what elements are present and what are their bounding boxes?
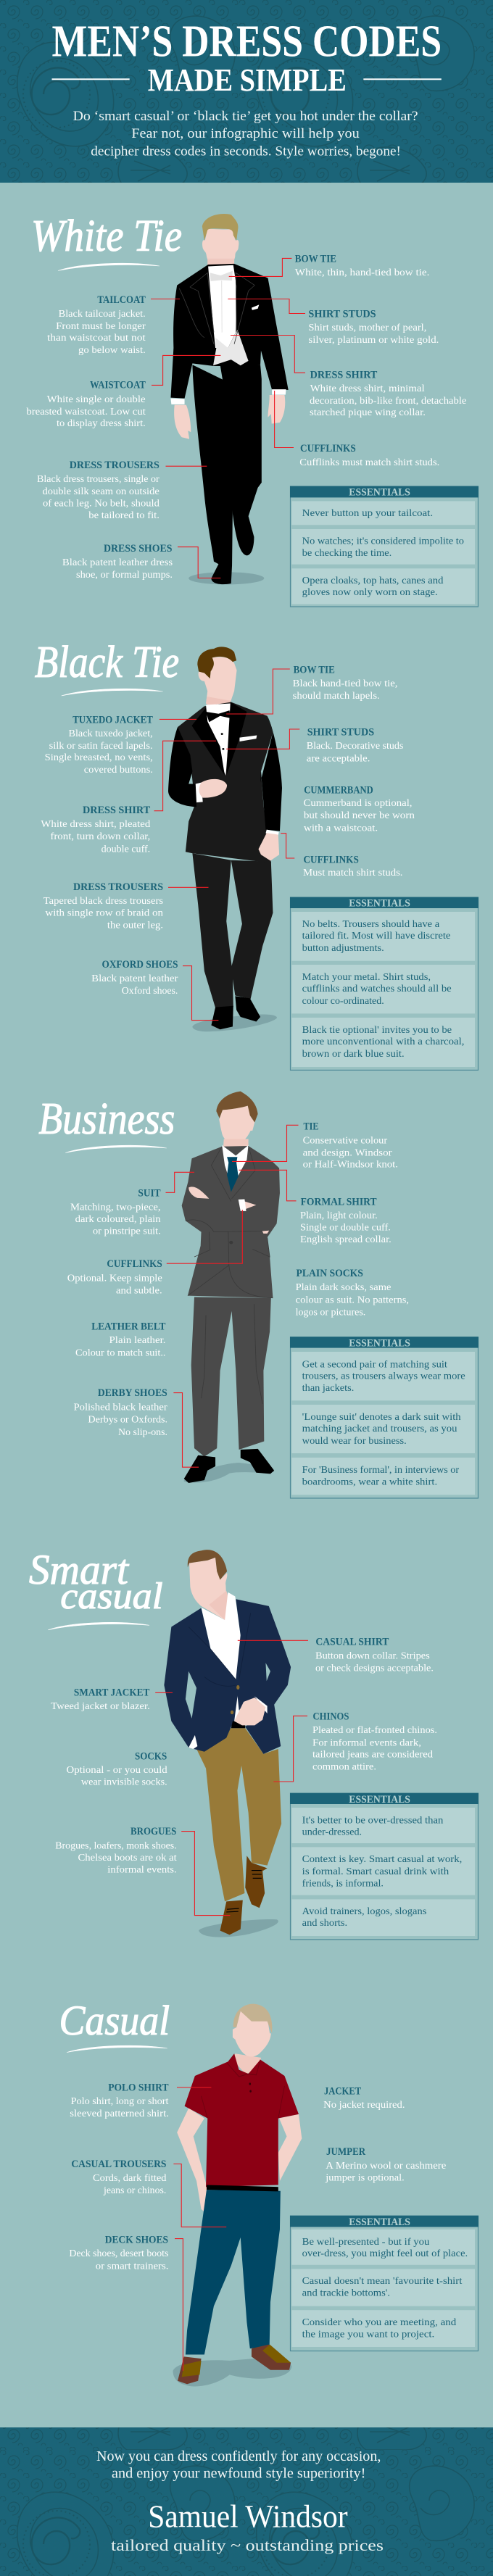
leader line: cufflinks (167, 1210, 242, 1263)
essentials panel: casual: Be well-presented - but if you (302, 2236, 430, 2247)
callout: waistcoat: to display dress shirt. (57, 417, 146, 428)
heading: Black Tie: Black Tie (35, 638, 179, 687)
callout: cufflinks: Must match shirt studs. (303, 867, 403, 878)
section: Business (38, 1092, 478, 1498)
callout: casual trousers: jeans or chinos. (103, 2185, 166, 2195)
essentials panel: casual (290, 2216, 478, 2351)
leader line: smart jacket (155, 1692, 173, 1693)
essentials panel: black tie: Match your metal. Shirt studs, (302, 971, 431, 982)
callout: oxford shoes (91, 959, 178, 996)
intro text: Do ‘smart casual’ or ‘black tie’ get you hot under the collar? (73, 109, 418, 124)
figure: black tie man (168, 647, 282, 1031)
heading: White Tie: White Tie (31, 212, 182, 261)
essentials panel: smart casual: Context is key. Smart casual at work, (302, 1853, 462, 1864)
essentials panel: black tie: Black tie optional' invites you to be (302, 1024, 452, 1035)
essentials panel: white tie: be checking the time. (302, 547, 392, 558)
callout: dress shirt: DRESS SHIRT (83, 805, 151, 816)
callout: dress shirt (41, 805, 151, 854)
essentials panel: white tie: No watches; it's considered impolite to (302, 536, 464, 547)
callout: tailcoat: go below waist. (78, 344, 146, 355)
callout: formal shirt (300, 1196, 392, 1245)
callout: bow tie (295, 253, 429, 278)
callout: bow tie: BOW TIE (294, 664, 335, 676)
heading: Business: Business (38, 1094, 175, 1144)
essentials panel: casual: Consider who you are meeting, and (302, 2317, 456, 2327)
heading: Smart casual: Smart (29, 1546, 130, 1593)
callout: dress trousers: DRESS TROUSERS (73, 881, 163, 893)
callout: dress shirt: decoration, bib-like front, detachable (310, 395, 466, 406)
tagline: tailored quality ~ outstanding prices (111, 2536, 384, 2554)
callout: chinos: For informal events dark, (312, 1737, 421, 1748)
essentials panel: business: trousers, as trousers always wear more (302, 1370, 465, 1381)
essentials panel: black tie: more unconventional with a charcoal, (302, 1036, 464, 1047)
leader line: bow tie (229, 258, 291, 276)
callout: dress shoes: shoe, or formal pumps. (76, 569, 173, 580)
callout: cufflinks: Optional. Keep simple (67, 1272, 162, 1283)
callout: deck shoes: DECK SHOES (105, 2235, 168, 2246)
callout: plain socks: Plain dark socks, same (296, 1281, 391, 1292)
callout: dress shoes (62, 543, 173, 580)
callout: derby shoes: DERBY SHOES (98, 1387, 167, 1399)
callout: chinos: tailored jeans are considered (312, 1748, 433, 1759)
callout: dress trousers: be tailored to fit. (88, 510, 160, 520)
callout: formal shirt: Single or double cuff. (300, 1221, 391, 1232)
leader line: casual shirt (238, 1640, 308, 1641)
callout: tailcoat: Front must be longer (56, 320, 146, 331)
callout: oxford shoes: Oxford shoes. (122, 985, 178, 996)
callout: dress trousers: of each leg. No belt, should (43, 498, 160, 509)
callout: shirt studs: silver, platinum or white gold. (308, 334, 439, 345)
callout: dress shirt: starched pique wing collar. (310, 407, 426, 417)
intro text: decipher dress codes in seconds. Style worries, begone! (91, 144, 401, 159)
callout: socks: SOCKS (135, 1751, 167, 1763)
callout: polo shirt (70, 2082, 169, 2119)
callout: dress shirt (310, 369, 466, 417)
heading: Smart casual (29, 1546, 163, 1630)
section: White Tie (26, 212, 478, 607)
callout: dress shirt: double cuff. (102, 843, 150, 854)
leader line: cufflinks (281, 834, 294, 858)
callout: brogues: Brogues, loafers, monk shoes. (55, 1840, 177, 1850)
essentials panel: business: Get a second pair of matching suit (302, 1358, 447, 1369)
leader line: suit (165, 1172, 194, 1192)
closing message: Now you can dress confidently for any occasion, (96, 2448, 381, 2464)
callout: oxford shoes: OXFORD SHOES (102, 959, 178, 971)
callout: dress trousers: with single row of braid on (45, 907, 163, 918)
callout: chinos: Pleated or flat-fronted chinos. (312, 1724, 437, 1735)
section: Black Tie (35, 638, 478, 1070)
callout: dress shoes: Black patent leather dress (62, 557, 173, 568)
callout: tailcoat: Black tailcoat jacket. (59, 308, 146, 319)
callout: shirt studs: are acceptable. (307, 752, 370, 764)
header banner (0, 0, 493, 183)
figure: casual man (173, 2004, 302, 2386)
callout: chinos: CHINOS (313, 1711, 349, 1722)
callout: deck shoes: Deck shoes, desert boots (69, 2248, 168, 2259)
leader line: dress shoes (178, 547, 220, 578)
callout: bow tie: White, thin, hand-tied bow tie. (295, 267, 429, 278)
brand name: Samuel Windsor (148, 2499, 348, 2535)
callout: dress trousers (44, 881, 163, 931)
callout: shirt studs: Black. Decorative studs (307, 740, 403, 751)
callout: leather belt: Colour to match suit.. (75, 1347, 165, 1358)
leader line: chinos (273, 1716, 307, 1782)
essentials panel: black tie: ESSENTIALS (349, 897, 410, 909)
leader line: formal shirt (239, 1170, 296, 1201)
essentials panel: black tie: tailored fit. Most will have discrete (302, 930, 450, 941)
callout: cufflinks: and subtle. (116, 1285, 162, 1296)
leader line: tailcoat (151, 299, 180, 300)
callout: cummerband: but should never be worn (304, 810, 415, 820)
callout: shirt studs (307, 727, 403, 764)
callout: polo shirt: POLO SHIRT (108, 2082, 169, 2094)
callout: suit (70, 1187, 161, 1236)
essentials panel: business: boardrooms, wear a white shirt. (302, 1476, 437, 1487)
leader line: dress shirt (231, 335, 305, 373)
essentials panel: smart casual: and shorts. (302, 1917, 347, 1928)
callout: cummerband: Cummerband is optional, (303, 797, 412, 808)
callout: jumper (325, 2146, 446, 2182)
callout: dress trousers: DRESS TROUSERS (70, 460, 160, 471)
callout: tie: Conservative colour (303, 1135, 388, 1145)
essentials panel: smart casual: friends, is informal. (302, 1877, 384, 1888)
callout: bow tie: Black hand-tied bow tie, (293, 678, 397, 689)
callout: casual shirt: Button down collar. Stripes (315, 1650, 430, 1661)
callout: socks: Optional - or you could (67, 1764, 167, 1775)
essentials panel: white tie: Opera cloaks, top hats, canes and (302, 575, 444, 586)
callout: chinos: common attire. (312, 1761, 376, 1772)
essentials panel: smart casual: is formal. Smart casual drink with (302, 1866, 449, 1877)
callout: dress trousers: Black dress trousers, single or (37, 473, 160, 484)
essentials panel: black tie (290, 897, 478, 1070)
essentials panel: business (290, 1337, 478, 1498)
leader line: deck shoes (175, 2239, 183, 2371)
callout: waistcoat (26, 380, 146, 428)
callout: casual trousers: Cords, dark fitted (93, 2172, 167, 2183)
callout: dress shirt: DRESS SHIRT (310, 369, 378, 381)
callout: polo shirt: Polo shirt, long or short (71, 2095, 169, 2106)
callout: derby shoes: Derbys or Oxfords. (88, 1413, 167, 1425)
callout: jumper: jumper is optional. (325, 2172, 405, 2182)
section: Smart casual (29, 1546, 478, 1940)
callout: shirt studs: SHIRT STUDS (308, 309, 376, 320)
leader line: derby shoes (173, 1393, 199, 1467)
callout: suit: SUIT (138, 1187, 161, 1199)
callout: tuxedo jacket: Black tuxedo jacket, (68, 728, 153, 739)
essentials panel: smart casual: Avoid trainers, logos, slogans (302, 1906, 426, 1916)
essentials panel: white tie: gloves now only worn on stage. (302, 586, 438, 597)
leader line: shirt studs (226, 729, 299, 749)
callout: tuxedo jacket: silk or satin faced lapels. (49, 740, 153, 751)
callout: formal shirt: English spread collar. (300, 1234, 392, 1245)
intro text: Fear not, our infographic will help you (131, 126, 360, 141)
footer banner (0, 2427, 493, 2576)
callout: deck shoes: or smart trainers. (96, 2260, 168, 2271)
leader line: brogues (181, 1832, 230, 1916)
callout: plain socks: logos or pictures. (296, 1306, 365, 1317)
callout: tuxedo jacket: Single breasted, no vents, (45, 752, 153, 763)
callout: cufflinks (303, 855, 403, 878)
callout: dress trousers: Tapered black dress trousers (44, 895, 163, 906)
callout: tuxedo jacket (45, 714, 153, 775)
callout: tailcoat: than waistcoat but not (47, 332, 146, 343)
closing message (96, 2448, 381, 2482)
essentials panel: smart casual: ESSENTIALS (349, 1794, 410, 1806)
callout: deck shoes (69, 2235, 168, 2271)
callout: tuxedo jacket: covered buttons. (84, 764, 153, 775)
essentials panel: business: matching jacket and trousers, as you (302, 1423, 457, 1434)
essentials panel: white tie (290, 486, 478, 607)
callout: smart jacket: Tweed jacket or blazer. (51, 1700, 150, 1711)
callout: formal shirt: FORMAL SHIRT (301, 1196, 377, 1208)
callout: bow tie (293, 664, 397, 701)
essentials panel: white tie: Never button up your tailcoat. (302, 507, 433, 518)
callout: tie: and design. Windsor (303, 1147, 392, 1158)
callout: cummerband: CUMMERBAND (304, 784, 373, 796)
leader line: bow tie (226, 669, 290, 714)
leader line: dress trousers (168, 886, 209, 888)
callout: tie: or Half-Windsor knot. (303, 1158, 398, 1170)
callout: cummerband: with a waistcoat. (304, 823, 378, 834)
essentials panel: black tie: colour co-ordinated. (302, 995, 384, 1006)
callout: leather belt: LEATHER BELT (91, 1321, 166, 1332)
callout: cufflinks: CUFFLINKS (300, 443, 356, 454)
leader line: tie (232, 1125, 299, 1161)
essentials panel: casual: the image you want to project. (302, 2329, 434, 2340)
callout: tailcoat: TAILCOAT (97, 294, 146, 306)
leader line: oxford shoes (183, 966, 218, 1021)
callout: brogues: informal events. (107, 1864, 177, 1874)
leader line: cufflinks (275, 391, 294, 448)
callout: chinos (312, 1711, 437, 1772)
callout: tailcoat (47, 294, 146, 355)
title: MADE SIMPLE (148, 62, 347, 98)
essentials panel: black tie: No belts. Trousers should have a (302, 918, 439, 929)
callout: jacket: JACKET (324, 2086, 361, 2098)
heading: Smart casual: casual (60, 1576, 163, 1617)
callout: brogues (55, 1826, 177, 1874)
callout: smart jacket (51, 1687, 150, 1711)
callout: suit: or pinstripe suit. (93, 1225, 161, 1236)
callout: waistcoat: breasted waistcoat. Low cut (26, 406, 146, 417)
essentials panel: business: For 'Business formal', in interviews or (302, 1464, 460, 1475)
essentials panel: business: would wear for business. (302, 1435, 407, 1446)
leader line: tuxedo jacket (160, 718, 196, 720)
callout: formal shirt: Plain, light colour. (300, 1210, 378, 1221)
callout: tie: TIE (303, 1121, 319, 1132)
essentials panel: smart casual (290, 1793, 478, 1940)
callout: casual shirt: CASUAL SHIRT (315, 1636, 389, 1648)
callout: cufflinks: Cufflinks must match shirt studs. (299, 457, 439, 468)
callout: plain socks (296, 1268, 409, 1317)
callout: shirt studs (308, 309, 439, 345)
leader line: dress shirt (154, 741, 216, 811)
callout: jumper: A Merino wool or cashmere (326, 2160, 446, 2171)
callout: cufflinks (67, 1258, 162, 1296)
callout: cummerband (303, 784, 415, 834)
figure: smart casual man (164, 1550, 291, 1937)
leader line: dress trousers (165, 465, 207, 467)
callout: casual trousers (71, 2159, 167, 2195)
callout: leather belt: Plain leather. (109, 1334, 165, 1345)
callout: waistcoat: WAISTCOAT (90, 380, 146, 391)
callout: casual trousers: CASUAL TROUSERS (71, 2159, 166, 2170)
leader line: casual trousers (173, 2164, 226, 2227)
essentials panel: casual: and trackie bottoms'. (302, 2288, 390, 2298)
callout: bow tie: BOW TIE (295, 253, 336, 265)
callout: brogues: Chelsea boots are ok at (78, 1852, 177, 1863)
callout: smart jacket: SMART JACKET (74, 1687, 150, 1699)
figure: business man (182, 1092, 280, 1483)
callout: socks (67, 1751, 167, 1787)
callout: jacket: No jacket required. (323, 2099, 405, 2110)
callout: socks: wear invisible socks. (81, 1776, 167, 1787)
callout: jacket (323, 2086, 405, 2110)
callout: dress shirt: White dress shirt, pleated (41, 818, 151, 829)
callout: jumper: JUMPER (326, 2146, 366, 2158)
callout: suit: dark coloured, plain (75, 1213, 161, 1224)
callout: oxford shoes: Black patent leather (91, 973, 178, 984)
callout: leather belt (75, 1321, 166, 1358)
callout: plain socks: colour as suit. No patterns, (296, 1295, 409, 1305)
callout: cufflinks: CUFFLINKS (303, 855, 359, 866)
callout: derby shoes (74, 1387, 167, 1437)
essentials panel: business: ESSENTIALS (349, 1337, 410, 1349)
callout: derby shoes: Polished black leather (74, 1401, 167, 1412)
callout: dress trousers: double silk seam on outside (42, 486, 160, 496)
leader line: polo shirt (177, 2087, 211, 2088)
essentials panel: business: than jackets. (302, 1382, 354, 1393)
callout: casual shirt (315, 1636, 434, 1673)
intro text (73, 109, 418, 159)
callout: suit: Matching, two-piece, (70, 1201, 161, 1212)
callout: dress shoes: DRESS SHOES (104, 543, 173, 554)
leader line: waistcoat (152, 355, 220, 385)
essentials panel: black tie: button adjustments. (302, 942, 384, 953)
callout: plain socks: PLAIN SOCKS (296, 1268, 363, 1279)
essentials panel: casual: over-dress, you might feel out of place. (302, 2248, 468, 2259)
callout: brogues: BROGUES (130, 1826, 176, 1837)
essentials panel: smart casual: under-dressed. (302, 1827, 362, 1837)
callout: dress trousers (37, 460, 160, 520)
section: Casual (59, 1997, 478, 2386)
closing message: and enjoy your newfound style superiority! (112, 2466, 365, 2482)
essentials panel: smart casual: It's better to be over-dressed than (302, 1815, 444, 1825)
essentials panel: black tie: cufflinks and watches should all be (302, 983, 452, 994)
callout: cufflinks: CUFFLINKS (107, 1258, 162, 1270)
callout: cufflinks (299, 443, 439, 468)
title (52, 17, 442, 98)
callout: bow tie: should match lapels. (293, 690, 380, 701)
callout: polo shirt: sleeved patterned shirt. (70, 2108, 169, 2119)
callout: dress shirt: front, turn down collar, (50, 831, 150, 842)
callout: dress shirt: White dress shirt, minimal (310, 383, 425, 394)
callout: waistcoat: White single or double (47, 394, 146, 404)
callout: tie (303, 1121, 398, 1170)
heading: Casual: Casual (59, 1997, 170, 2044)
callout: tuxedo jacket: TUXEDO JACKET (72, 714, 153, 726)
essentials panel: business: 'Lounge suit' denotes a dark suit with (302, 1411, 461, 1422)
callout: shirt studs: Shirt studs, mother of pearl, (308, 322, 426, 333)
essentials panel: white tie: ESSENTIALS (349, 487, 410, 499)
callout: shirt studs: SHIRT STUDS (307, 727, 374, 739)
essentials panel: casual: Casual doesn't mean 'favourite t-shirt (302, 2275, 463, 2286)
callout: dress trousers: the outer leg. (107, 919, 163, 931)
leader line: shirt studs (228, 299, 305, 313)
callout: derby shoes: No slip-ons. (118, 1426, 167, 1437)
essentials panel: casual: ESSENTIALS (349, 2216, 410, 2228)
callout: casual shirt: or check designs acceptable. (315, 1662, 434, 1673)
figure: white tie man (170, 214, 289, 584)
essentials panel: black tie: brown or dark blue suit. (302, 1048, 405, 1059)
